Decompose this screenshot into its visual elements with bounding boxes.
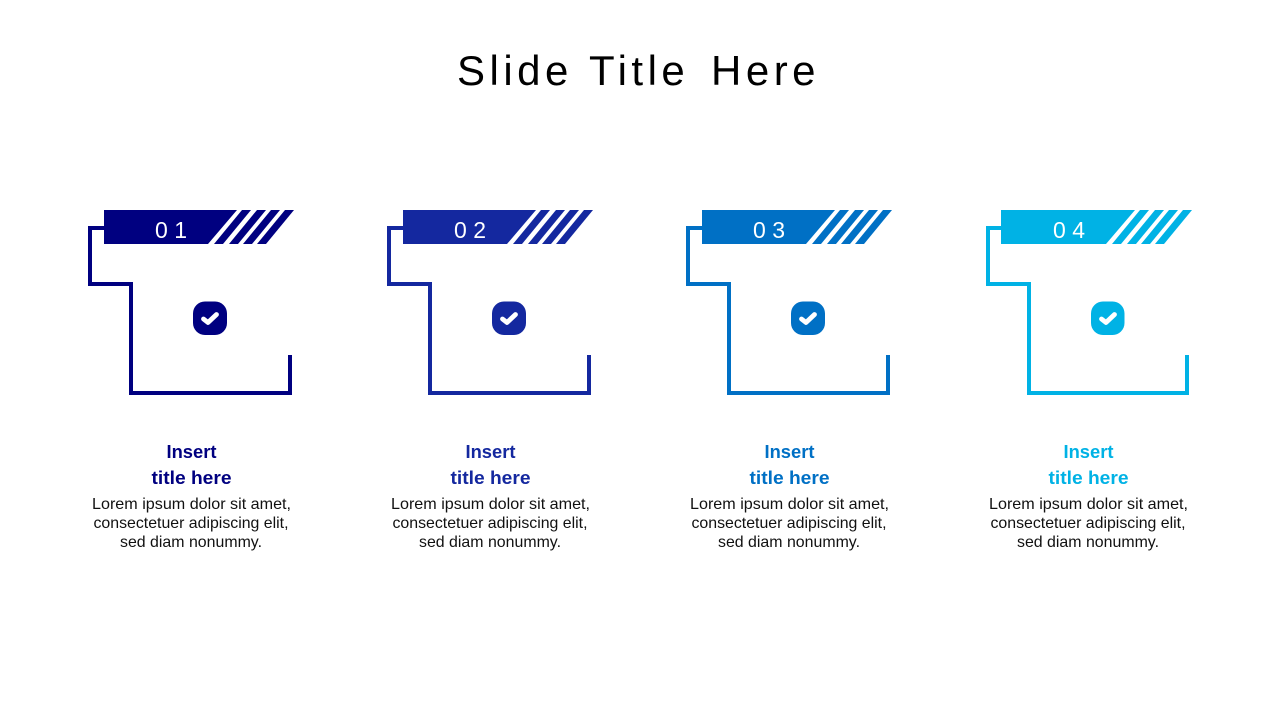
frame outline 01: [90, 228, 290, 393]
icon: check badge 04: [1091, 302, 1124, 335]
text block 04: Lorem ipsum dolor sit amet,: [989, 496, 1188, 513]
text block 01: consectetuer adipiscing elit,: [94, 515, 288, 532]
text block 04: Insert: [1064, 442, 1114, 462]
panel: step 02: [389, 210, 593, 551]
icon: check badge 03: [791, 302, 825, 335]
number banner 04: [1001, 210, 1192, 244]
text block 01: Lorem ipsum dolor sit amet,: [92, 496, 291, 513]
text block 02: consectetuer adipiscing elit,: [392, 515, 588, 532]
text block 04: consectetuer adipiscing elit,: [990, 515, 1186, 532]
text block 01: [92, 442, 291, 551]
icon: check badge 02: [492, 302, 526, 335]
panel: step 03: [688, 210, 892, 551]
number banner 03: [702, 210, 892, 244]
text block 03: title here: [750, 468, 830, 488]
number 01: 01: [155, 217, 187, 243]
text block 04: [989, 442, 1188, 551]
text block 02: title here: [450, 468, 530, 488]
panel: step 01: [90, 210, 294, 551]
text block 02: sed diam nonummy.: [419, 534, 561, 551]
text block 02: Insert: [466, 442, 516, 462]
icon: check badge 01: [193, 302, 227, 335]
title: Slide: [457, 47, 573, 94]
text block 04: title here: [1048, 468, 1128, 488]
text block 04: sed diam nonummy.: [1017, 534, 1159, 551]
text block 02: Lorem ipsum dolor sit amet,: [391, 496, 590, 513]
text block 03: Insert: [764, 442, 814, 462]
number banner 02: [403, 210, 593, 244]
frame outline 02: [389, 228, 589, 393]
text block 02: [391, 442, 590, 551]
number 04: 04: [1053, 217, 1085, 243]
panel: step 04: [988, 210, 1192, 551]
title: Title: [589, 47, 689, 94]
text block 03: sed diam nonummy.: [718, 534, 860, 551]
text block 03: consectetuer adipiscing elit,: [692, 515, 886, 532]
text block 01: sed diam nonummy.: [120, 534, 262, 551]
title: Here: [711, 47, 820, 94]
frame outline 04: [988, 228, 1187, 393]
number 03: 03: [753, 217, 785, 243]
text block 01: Insert: [166, 442, 216, 462]
text block 03: [690, 442, 889, 551]
text block 01: title here: [152, 468, 232, 488]
text block 03: Lorem ipsum dolor sit amet,: [690, 496, 889, 513]
number banner 01: [104, 210, 294, 244]
frame outline 03: [688, 228, 888, 393]
number 02: 02: [454, 217, 486, 243]
